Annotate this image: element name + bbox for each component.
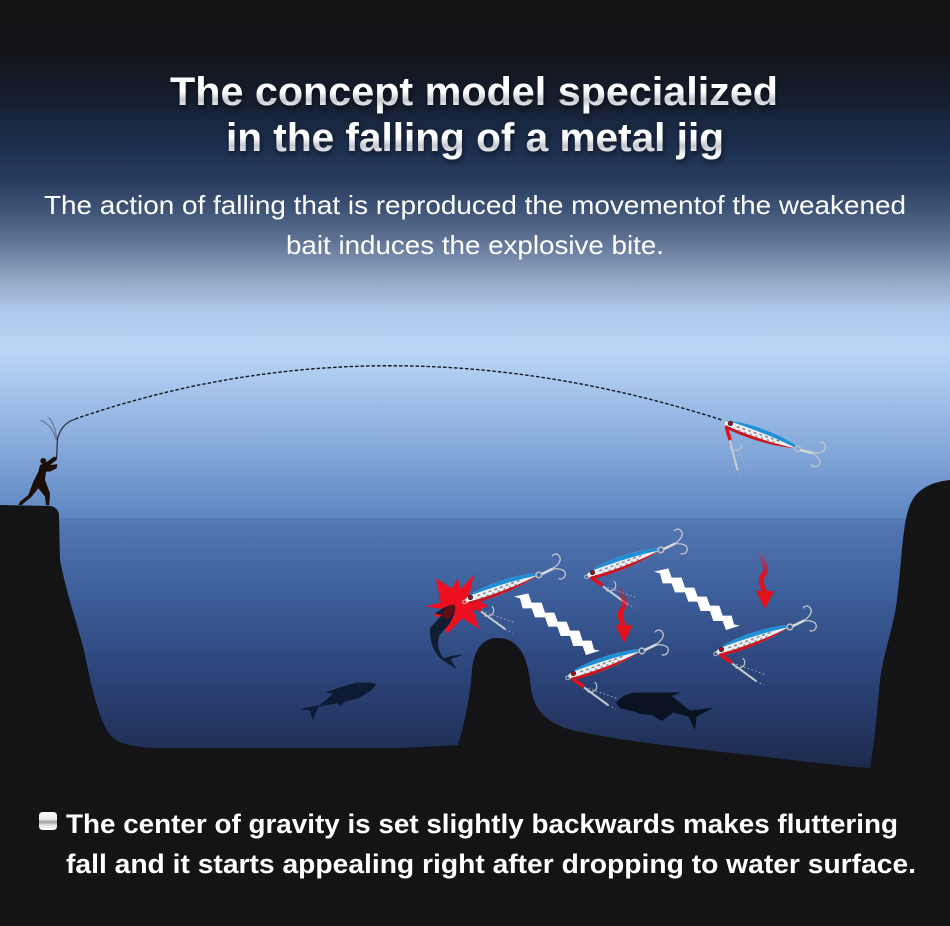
bottom explanation text: The center of gravity is set slightly backwards makes fluttering: [66, 809, 898, 839]
subtitle text: [44, 190, 906, 260]
striking fish: [430, 605, 463, 669]
subtitle text: bait induces the explosive bite.: [286, 230, 664, 260]
falling arrow right: [756, 551, 774, 609]
bottom explanation text: [66, 809, 916, 879]
water body: [0, 518, 950, 778]
bullet icon: [39, 812, 57, 830]
lure: at surface falling: [705, 405, 827, 503]
title: The concept model specialized: [170, 70, 778, 114]
red strike burst: [425, 574, 488, 634]
subtitle text: The action of falling that is reproduced the movementof the weakened: [44, 190, 906, 220]
lure: lower right: [708, 605, 829, 696]
title: in the falling of a metal jig: [226, 116, 724, 160]
title: [170, 70, 778, 160]
bottom explanation text: fall and it starts appealing right after dropping to water surface.: [66, 849, 916, 879]
seabed and cliffs silhouette: [0, 480, 950, 926]
striking fish head in burst: [442, 605, 455, 620]
lure: upper middle: [579, 528, 700, 619]
fish lower left: [299, 683, 376, 720]
lure: lower middle: [560, 629, 681, 720]
zigzag fluttering path right: [654, 568, 740, 630]
falling arrow left: [616, 585, 632, 643]
large fish near seabed: [616, 692, 713, 730]
zigzag fluttering path left: [514, 593, 600, 655]
angler silhouette with bent rod: [18, 417, 75, 505]
fishing line: [75, 366, 722, 420]
lure: strike target: [457, 553, 578, 644]
